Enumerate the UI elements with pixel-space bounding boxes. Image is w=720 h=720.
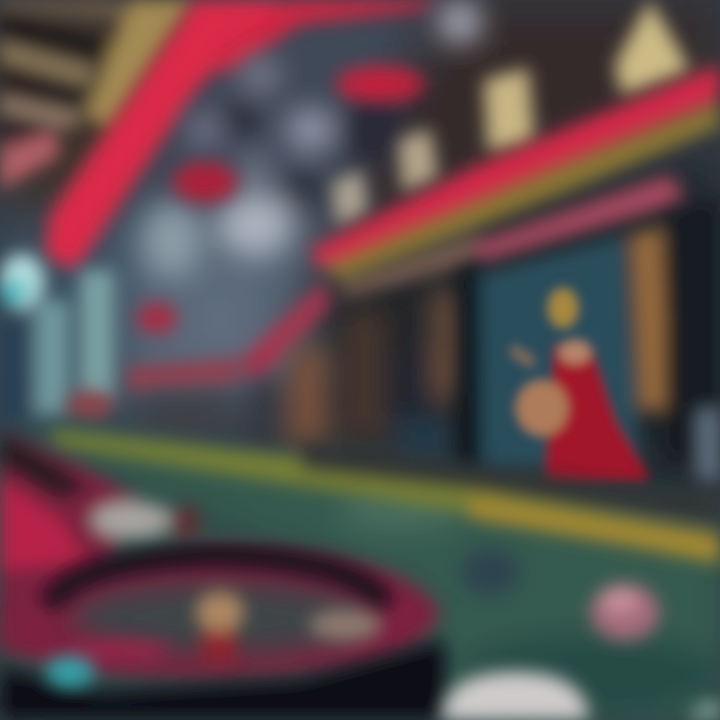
table: green felt — [40, 430, 720, 720]
patrons: blurred standing figures — [140, 290, 467, 465]
glowing cyan orb — [0, 254, 44, 310]
table left: dark and crimson edge — [0, 430, 201, 640]
red diagonal ceiling band — [45, 0, 440, 270]
wheel: centre bowl — [72, 582, 372, 654]
roulette wheel — [0, 545, 445, 720]
wheel: dark base — [0, 640, 445, 720]
chip: pale lower right — [690, 700, 720, 720]
red ceiling signs — [137, 66, 424, 333]
windows: tan lit panels — [332, 0, 690, 226]
painting: seated figure in red — [509, 288, 650, 482]
chip: white — [441, 672, 589, 720]
left wall: pale blue columns — [0, 270, 114, 420]
chips: scattered on felt — [441, 548, 720, 720]
wheel: cyan ball — [46, 656, 94, 688]
grey ceiling panels and lights — [142, 0, 482, 356]
lower wall: pink diagonal rail — [66, 280, 330, 419]
wheel: centre spindle — [70, 592, 381, 662]
right red and gold band — [310, 65, 720, 298]
ceiling: tan and dark stripes top left — [0, 0, 195, 190]
wheel: outer red rim — [0, 545, 440, 678]
painting: framed teal panel — [458, 195, 720, 480]
wheel: dark inner ring — [50, 555, 385, 605]
chip: dark blue — [460, 548, 520, 596]
chip: pink — [591, 584, 659, 640]
table: gold edge stripe — [50, 430, 720, 564]
